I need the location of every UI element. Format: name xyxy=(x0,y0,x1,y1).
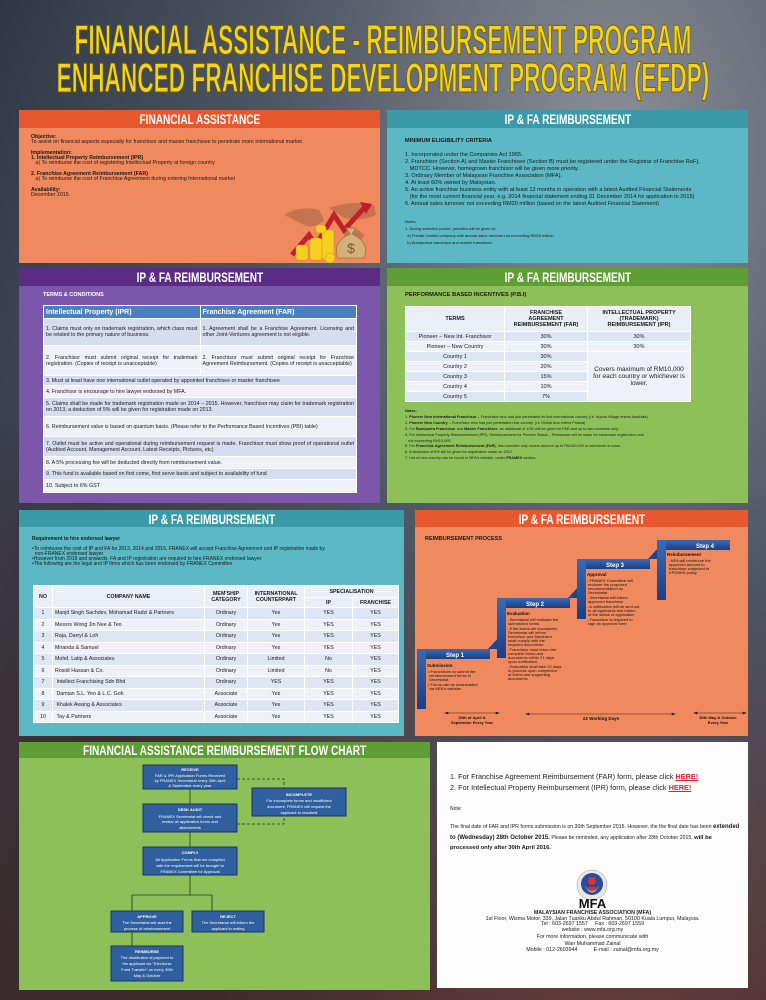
table: PBI: Pioneer – New Country xyxy=(427,344,483,350)
table: endorsed firms: Associate xyxy=(215,702,237,708)
table: endorsed firms: YES xyxy=(370,668,381,674)
table: PBI: 15% xyxy=(540,374,552,380)
table: endorsed firms: YES xyxy=(323,633,334,639)
table: endorsed firms: YES xyxy=(370,691,381,697)
step 1: Submission xyxy=(427,663,453,668)
step 3 xyxy=(577,546,660,626)
text block: objective: Implementation: xyxy=(31,150,72,156)
chart: flow chart: The Secretariat will inform the xyxy=(202,920,255,925)
chart: steps xyxy=(417,540,747,725)
panel: reimbursement process xyxy=(415,510,748,736)
table: endorsed firms: Damian S.L. Yeo & L.C. Goh xyxy=(56,691,124,697)
chart: flow chart: The distribution of payment to xyxy=(121,955,174,960)
text block: requirement: Requirement to hire endorsed lawyer xyxy=(32,536,120,542)
heading: ip & fa reimbursement: IP & FA REIMBURSEMENT xyxy=(504,111,631,127)
table: PBI: lower. xyxy=(630,380,647,387)
text block: objective: a) To reimburse the cost of registering Intellectual Property at foreign country xyxy=(35,160,215,166)
step 1: • Franchisors to submit the xyxy=(428,669,476,674)
step 1: Step 1 xyxy=(446,653,465,659)
chart: flow chart: APPROVE xyxy=(137,914,157,919)
table: endorsed firms: Tay & Partners xyxy=(56,714,91,720)
table: endorsed firms: 4 xyxy=(42,645,44,651)
table: endorsed firms: 10 xyxy=(40,714,46,720)
chart: flow chart: All Application Forms that are complied xyxy=(155,857,225,862)
step 2: Secretariat will inform xyxy=(508,630,547,635)
table: PBI xyxy=(405,306,691,402)
table: endorsed firms: Yes xyxy=(272,610,280,616)
table: endorsed firms: YES xyxy=(370,702,381,708)
step 1: • Forms can be downloaded xyxy=(428,682,478,687)
step 4: Step 4 xyxy=(696,544,715,550)
text block: minimum eligibility criteria: 1. Incorporated under the Companies Act 1965. xyxy=(405,152,523,158)
text block: requirement xyxy=(32,536,325,567)
step 2: Step 2 xyxy=(526,602,545,608)
heading: financial assistance xyxy=(19,110,380,128)
table: endorsed firms: YES xyxy=(323,622,334,628)
chart: flow chart: attachments xyxy=(179,825,201,830)
step 4: approved amount to xyxy=(669,562,705,567)
step 2: documents xyxy=(508,676,528,681)
table: endorsed firms: YES xyxy=(370,645,381,651)
chart: steps: Every Year xyxy=(708,720,729,725)
table: terms: 7. Outlet must be active and operational during reimbursement request is made. Franchisor must show proof of operational outlet (Audited Account, Management Account, Latest Receipts, Pictures, etc) xyxy=(46,440,354,452)
step 2: documents within 21 days xyxy=(508,655,554,660)
heading: ip & fa reimbursement xyxy=(387,110,748,128)
table: endorsed firms: YES xyxy=(370,656,381,662)
table: endorsed firms: NO xyxy=(39,594,47,600)
text block: address xyxy=(486,910,699,953)
heading xyxy=(19,268,380,286)
table: PBI: 30% xyxy=(540,344,552,350)
text block: PBI notes: not exceeding RM15,000. xyxy=(408,439,451,443)
chart: flow chart: review all application forms and xyxy=(162,819,218,824)
text block: minimum eligibility criteria: MDTCC. However, homegrown franchisor will be given more priority. xyxy=(410,166,579,172)
table: terms: 1. Agreement shall be a Franchise Agreement. Licensing and other Joint-Ventures agreement is not eligible. xyxy=(202,326,354,338)
chart: flow chart: The Secretariat will start the xyxy=(122,920,173,925)
step 2: Evaluation xyxy=(507,611,530,616)
table: terms: 4. Franchisor is encourage to hire lawyer endorsed by MFA. xyxy=(46,388,186,394)
text block: address: MALAYSIAN FRANCHISE ASSOCIATION (MFA) xyxy=(534,910,651,916)
table: PBI: Country 1 xyxy=(443,354,467,360)
text block: address: Wan Muhammad Zainal xyxy=(564,941,621,947)
table: terms: Franchise Agreement (FAR) xyxy=(202,308,294,316)
table: endorsed firms: YES xyxy=(271,679,281,685)
chart: flow chart: RECEIVE xyxy=(181,767,199,772)
table: endorsed firms: CATEGORY xyxy=(211,596,241,602)
step 3: - A notification will be sent out xyxy=(587,604,640,609)
chart: flow chart: May & October xyxy=(134,973,161,978)
table: endorsed firms: SPECIALISATION xyxy=(329,588,374,594)
heading xyxy=(19,510,404,527)
chart: flow chart: FAR & IPR Application Forms Received xyxy=(155,773,225,778)
text block: PBI notes: Notes: xyxy=(405,409,417,413)
text block: address: For more information, please communicate with xyxy=(537,934,648,940)
text block: form links: 2. For Intellectual Property Reimbursement (IPR) form, please click HERE! xyxy=(450,783,691,792)
step 3: - Franchisor is required to xyxy=(587,617,633,622)
table: terms: 5. Claims shall be made for trademark registration made on 2014 – 2015. However, franchisor may claim for trademark registration on 2013, a deduction of 5% will be given for registration made on 2013. xyxy=(46,401,354,413)
text block: address: website : www.mfa.org.my xyxy=(562,927,623,933)
panel: performance based incentives xyxy=(387,268,748,503)
chart: flow chart: INCOMPLETE xyxy=(286,792,312,797)
table: endorsed firms: Yes xyxy=(272,622,280,628)
table: PBI: Country 3 xyxy=(443,374,467,380)
table: endorsed firms: Yes xyxy=(272,633,280,639)
table: PBI: Pioneer – New Int. Franchisor xyxy=(419,334,491,340)
text block: requirement: •The following are the legal and IP firms which has been endorsed by FRANEX Committee xyxy=(32,561,232,567)
text block: objective xyxy=(31,134,303,198)
table: terms: 1. Claims must only on trademark registration, which class must be related to the primary nature of business. xyxy=(46,326,198,338)
step 2: required documents. xyxy=(508,642,544,647)
table: PBI: 30% xyxy=(540,334,552,340)
chart: steps: 30th of April & xyxy=(458,715,486,720)
heading: IP & FA REIMBURSEMENT xyxy=(148,511,275,527)
text block: address: 1st Floor, Wisma Motor, 339, Jalan Tuanku Abdul Rahman, 50100 Kuala Lumpur, Malaysia. xyxy=(486,916,699,922)
text: reimbursement process: REIMBURSEMENT PROCESS xyxy=(425,536,502,542)
step 2: of forms and supporting xyxy=(508,672,550,677)
chart: steps: September Every Year xyxy=(451,720,494,725)
text block: notes: Notes: xyxy=(405,219,417,224)
step 2: - Secretariat will evaluate the xyxy=(507,617,559,622)
table: terms: 3. Must at least have one international outlet operated by appointed franchisee or master franchisee xyxy=(46,378,280,384)
step 3: Secretariat xyxy=(588,590,608,595)
table: endorsed firms: Yes xyxy=(272,645,280,651)
table: terms: 9. This fund is available based on first come, first serve basis and subject to availability of fund xyxy=(46,471,267,477)
table: PBI: 20% xyxy=(540,364,552,370)
icon: money illustration xyxy=(284,202,376,263)
text block: notes: a) Private Limited company with annual sales turnover not exceeding RM20 million xyxy=(407,233,554,238)
step 4: - MFA will reimburse the xyxy=(668,558,711,563)
table: endorsed firms: Raja, Darryl & Loh xyxy=(55,633,98,639)
step 1: Secretariat. xyxy=(429,677,449,682)
text block: form links xyxy=(450,772,698,792)
step 3: endorse the proposed xyxy=(588,582,627,587)
step 2: to process upon completion xyxy=(508,668,557,673)
table: PBI: TERMS xyxy=(445,316,465,322)
text: PBI title: PERFORMANCE BASED INCENTIVES (P.B.I) xyxy=(405,292,526,298)
chart: flow chart: FRANEX Committee for Approval xyxy=(160,869,220,874)
step 1: via MFA's website. xyxy=(429,686,462,691)
heading: IP & FA REIMBURSEMENT xyxy=(504,269,631,285)
table: endorsed firms: YES xyxy=(370,679,381,685)
step 1: reimbursement forms to xyxy=(429,673,472,678)
table: endorsed firms: Ordinary xyxy=(216,610,236,616)
table: endorsed firms: Khalek Awang & Associates xyxy=(56,702,122,708)
step 4 xyxy=(657,540,730,600)
panel: eligibility criteria xyxy=(387,110,748,263)
table: endorsed firms: FRANCHISE xyxy=(360,600,391,606)
table: PBI: for each country or whichever is xyxy=(593,373,685,380)
table: endorsed firms: No xyxy=(325,656,332,662)
text block: PBI notes: 1. Pioneer New International Franchisor – Franchisor who had just penetrated its first international country (i.e. Arjuna Village enters Australia) xyxy=(405,415,648,419)
text block: PBI notes: 3. For Bumiputra Franchisor and Master Franchisee, an additional of 10% will be given for FAR and up to two countries only. xyxy=(405,427,619,431)
text block: objective: Objective: xyxy=(31,134,57,140)
heading xyxy=(19,742,430,758)
text block: requirement: •However from 2016 and onwards, FA and IP registration are required to hire FRANEX endorsed lawyer xyxy=(32,556,261,562)
table: endorsed firms: 9 xyxy=(42,702,44,708)
table: PBI: Country 4 xyxy=(443,384,467,390)
heading: FINANCIAL ASSISTANCE REIMBURSEMENT FLOW CHART xyxy=(83,742,366,758)
step 3: of the status of application xyxy=(588,612,634,617)
text block: minimum eligibility criteria: (for the most current financial year. e.g. 2014 financial statement ending 31 December 2014 for application in 2015) xyxy=(410,194,694,200)
panel: forms & contact: The final date of FAR and IPR forms submission is on 30th September 2015. However, the the final date has been extended to (Wednesday) 28th October 2015. Please be reminded, any application after 28th October 2015, will be processed only after 30th April 2016. xyxy=(450,824,739,851)
table: endorsed firms: 6 xyxy=(42,668,44,674)
step 3: recommendation by xyxy=(588,586,623,591)
text block: objective: 2. Franchise Agreement Reimbursement (FAR) xyxy=(31,171,148,177)
panel: flow chart xyxy=(19,742,430,990)
chart: flow chart xyxy=(110,764,346,982)
arrows: timeline xyxy=(445,712,746,715)
chart: flow chart: applicant to resubmit xyxy=(281,810,318,815)
table: PBI: Country 2 xyxy=(443,364,467,370)
table: endorsed firms: Mohd. Latip & Associates xyxy=(55,656,114,662)
text block: notes: b) Bumiputera franchisor and master franchisee. xyxy=(407,240,493,245)
chart: flow chart: REIMBURSE xyxy=(135,949,159,954)
table: endorsed firms: 5 xyxy=(42,656,44,662)
chart: flow chart: COMPLY xyxy=(182,850,199,855)
step 2: - Franchisor must return the xyxy=(507,647,557,652)
table: endorsed firms: Ordinary xyxy=(216,668,236,674)
step 2: - If the forms are incomplete, xyxy=(507,626,558,631)
chart: flow chart: For incomplete forms and insufficient xyxy=(266,798,333,803)
table: endorsed firms: 1 xyxy=(42,610,44,616)
table: PBI: REIMBURSEMENT (IPR) xyxy=(608,322,670,328)
title xyxy=(57,16,709,101)
table: endorsed firms: 7 xyxy=(42,679,44,685)
step 2: complete forms and xyxy=(508,651,543,656)
table: endorsed firms: YES xyxy=(370,633,381,639)
step 2: - Evaluation shall take 22 days xyxy=(507,664,561,669)
text block: objective: a) To reimburse the cost of Franchise Agreement during entering International market xyxy=(35,176,235,182)
table: endorsed firms: 8 xyxy=(42,691,44,697)
text block: minimum eligibility criteria: 6. Annual sales turnover not exceeding RM20 million (based on the latest Audited Financial Statement) xyxy=(405,201,659,207)
chart: flow chart: document, FRANEX will request the xyxy=(267,804,332,809)
heading xyxy=(415,510,748,527)
text block: minimum eligibility criteria: 4. At least 60% owned by Malaysian. xyxy=(405,180,496,186)
text block: minimum eligibility criteria: 2. Franchisor (Section A) and Master Franchisee (Section B) must be registered under the Registrar of Franchise RoF), xyxy=(405,159,700,165)
table: terms: 8. A 5% processing fee will be deducted directly from reimbursement value. xyxy=(46,460,222,466)
text block: minimum eligibility criteria: 3. Ordinary Member of Malaysian Franchise Association (MFA). xyxy=(405,173,562,179)
panel: forms & contact xyxy=(437,742,748,988)
table: endorsed firms: Rosidi Hassan & Co. xyxy=(55,668,104,674)
text block: minimum eligibility criteria: 5. An active franchise business entity with at least 12 months in operation with a latest Audited Financial Statements xyxy=(405,187,691,193)
table: endorsed firms: Manjit Singh Sachdev, Mohamad Radzi & Partners xyxy=(55,610,174,616)
table: endorsed firms: Messrs Wong Jin Nee & Teo xyxy=(55,622,122,628)
table: PBI: AGREEMENT xyxy=(528,316,564,322)
table: endorsed firms: YES xyxy=(323,702,334,708)
table: endorsed firms: Ordinary xyxy=(216,622,236,628)
table: PBI: 30% xyxy=(540,354,552,360)
chart: flow chart: FRANEX Secretariat will check and xyxy=(159,814,221,819)
chart: flow chart: Fund Transfer" on every 30th xyxy=(121,967,173,972)
text block: PBI notes: 4. For Intellectual Property Reimbursement (IPR), Reimbursement for Pioneer Status – Reimburse will be made for trademark registration cost xyxy=(405,433,644,437)
table: endorsed firms: Yes xyxy=(272,714,280,720)
heading: financial assistance: FINANCIAL ASSISTANCE xyxy=(139,111,260,127)
step 3: - Secretariat will inform xyxy=(587,595,628,600)
table: endorsed firms: Limited xyxy=(267,668,285,674)
step 3: Approval xyxy=(587,572,607,577)
step 3: to all applicants and inform xyxy=(588,608,636,613)
text: terms & conditions: TERMS & CONDITIONS xyxy=(43,292,104,298)
panel: financial assistance xyxy=(19,110,380,263)
table: endorsed firms: Yes xyxy=(272,702,280,708)
step 2: submission forms xyxy=(508,621,539,626)
table: endorsed firms: Ordinary xyxy=(216,645,236,651)
text block: address: Mobile : 012-2603944 E-mail : zainal@mfa.org.my xyxy=(526,947,659,953)
chart: flow chart: process of reimbursement xyxy=(124,926,171,931)
table: PBI: REIMBURSEMENT (FAR) xyxy=(514,322,578,328)
text block: note: Note: xyxy=(450,806,462,812)
table: endorsed firms: Ordinary xyxy=(216,679,236,685)
table: PBI: INTELLECTUAL PROPERTY xyxy=(602,310,676,316)
text: MFA: MFA xyxy=(579,896,606,911)
heading xyxy=(387,268,748,286)
heading: IP & FA REIMBURSEMENT xyxy=(518,511,645,527)
table: PBI: FRANCHISE xyxy=(530,310,562,316)
step 2 xyxy=(497,585,580,681)
table: endorsed firms: YES xyxy=(323,714,334,720)
step 3: sign an approval form xyxy=(588,621,627,626)
chart: steps: 30th May & October xyxy=(699,715,737,720)
chart: flow chart: & September every year xyxy=(168,783,212,788)
text block: objective: To assist on financial aspects especially for franchisor and master franchisee to penetrate more international market. xyxy=(31,139,303,145)
table: endorsed firms: No xyxy=(325,668,332,674)
step 2: franchisor and franchisor xyxy=(508,634,553,639)
table: endorsed firms: YES xyxy=(370,622,381,628)
text block: PBI notes: 7. List of new country can be found in MFA's website, under FRAMEX section. xyxy=(405,456,536,460)
step 3: Step 3 xyxy=(606,563,625,569)
table: endorsed firms: Miranda & Samuel xyxy=(55,645,99,651)
table: endorsed firms: YES xyxy=(370,610,381,616)
table: endorsed firms: YES xyxy=(323,679,334,685)
icon: money illustration: $ xyxy=(347,240,355,256)
text block: PBI notes: 2. Pioneer New Country – Franchisor who had just penetrated new country. (i.e Global Arts enters Poland) xyxy=(405,421,585,425)
text block: requirement: •To reimburse the cost of IP and FA for 2013, 2014 and 2015, FRANEX will accept Franchise Agreement and IP registration made by xyxy=(32,546,325,552)
heading: IP & FA REIMBURSEMENT xyxy=(136,269,263,285)
title: ENHANCED FRANCHISE DEVELOPMENT PROGRAM (EFDP) xyxy=(57,54,709,101)
table: PBI: Covers maximum of RM10,000 xyxy=(594,366,684,373)
table: endorsed firms: YES xyxy=(370,714,381,720)
chart: steps: 22 Working Days xyxy=(583,716,620,721)
icon: MFA logo xyxy=(576,870,608,900)
chart: flow chart: by FRANEX Secretariat every 30th April xyxy=(155,778,225,783)
table: endorsed firms: INTERNATIONAL xyxy=(255,590,297,596)
table: endorsed firms: COMPANY NAME xyxy=(107,594,150,600)
text block: minimum eligibility criteria xyxy=(405,138,700,207)
text block: notes xyxy=(405,219,554,245)
table: endorsed firms: IP xyxy=(326,600,331,606)
text block: minimum eligibility criteria: MINIMUM ELIGIBILITY CRITERIA xyxy=(405,138,492,144)
table: endorsed firms: Yes xyxy=(272,691,280,697)
chart: flow chart: REJECT xyxy=(220,914,236,919)
chart: flow chart: applicant in writing xyxy=(212,926,244,931)
text block: PBI notes xyxy=(405,409,648,460)
text block: PBI notes: 5. For Franchise Agreement Reimbursement (FAR), this incentive only covers amount up to RM150,000 or whichever is lower. xyxy=(405,444,621,448)
text block: PBI notes: 6. A deduction of 5% will be given for registration made on 2012. xyxy=(405,450,513,454)
text block: address: Tel : 603-2697 1557 Fax : 603-2697 1559 xyxy=(541,921,644,927)
table: terms: Intellectual Property (IPR) xyxy=(46,308,132,316)
step 4: Reimbursement xyxy=(667,552,702,557)
table: endorsed firms: YES xyxy=(323,691,334,697)
text block: objective: Availability: xyxy=(31,187,61,193)
table: endorsed firms: 2 xyxy=(42,622,44,628)
step 4: KPDNKK policy xyxy=(669,570,697,575)
step 2: shall comply with the xyxy=(508,638,546,643)
table: endorsed firms: Associate xyxy=(215,691,237,697)
table: endorsed firms: 3 xyxy=(42,633,44,639)
table: endorsed firms: YES xyxy=(323,645,334,651)
text block: objective: December 2015 xyxy=(31,192,69,198)
table: endorsed firms: Ordinary xyxy=(216,656,236,662)
table: endorsed firms: Limited xyxy=(267,656,285,662)
table: endorsed firms: Intellect Franchising Sdn Bhd xyxy=(56,679,125,685)
chart: flow chart: the applicant via "Electronic xyxy=(122,961,172,966)
table: PBI: 7% xyxy=(542,394,550,400)
step 3: approved franchisor xyxy=(588,599,624,604)
table: PBI: (TRADEMARK) xyxy=(619,316,659,322)
panel: endorsed lawyers xyxy=(19,510,404,736)
chart: flow chart: DESK AUDIT xyxy=(178,807,203,812)
text block: objective: 1. Intellectual Property Reimbursement (IPR) xyxy=(31,155,143,161)
panel: terms & conditions xyxy=(19,268,380,503)
text block: form links: 1. For Franchise Agreement Reimbursement (FAR) form, please click HERE! xyxy=(450,772,698,781)
step 3: - FRANEX Committee will xyxy=(587,578,633,583)
table: terms: 2. Franchisor must submit original receipt for Franchise Agreement Reimbursement. (Copies of receipt is unacceptable) xyxy=(202,354,354,366)
step 4: franchisor subjected to xyxy=(669,566,710,571)
step 1 xyxy=(417,636,500,709)
text block: notes: 1. During selection period, priorities will be given to: xyxy=(405,226,496,231)
table: endorsed firms: YES xyxy=(323,610,334,616)
table: PBI: 30% xyxy=(633,334,644,340)
table: PBI: Country 5 xyxy=(443,394,467,400)
table: endorsed firms: COUNTERPART xyxy=(256,596,296,602)
table: terms: 2. Franchisor must submit original receipt for trademark registration. (Copies of receipt is unacceptable) xyxy=(46,354,198,366)
table: terms: 10. Subject to 6% GST xyxy=(46,483,100,489)
step 2: upon notification. xyxy=(508,659,538,664)
table: endorsed firms: MEM'SHIP xyxy=(213,590,239,596)
table: endorsed firms xyxy=(33,585,399,723)
table: PBI: 30% xyxy=(633,344,644,350)
text block: requirement: non-FRANEX endorsed lawyer. xyxy=(35,551,104,557)
table: endorsed firms: Ordinary xyxy=(216,633,236,639)
table: terms: 6. Reimbursement value is based on quantum basis. (Please refer to the Performance Based Incentives (PBI) table) xyxy=(46,424,318,430)
title: FINANCIAL ASSISTANCE - REIMBURSEMENT PROGRAM xyxy=(75,16,691,63)
chart: flow chart: with the requirement will be brought to xyxy=(156,863,225,868)
table: endorsed firms: Associate xyxy=(215,714,237,720)
table: PBI: 10% xyxy=(540,384,552,390)
table: terms xyxy=(43,305,357,493)
